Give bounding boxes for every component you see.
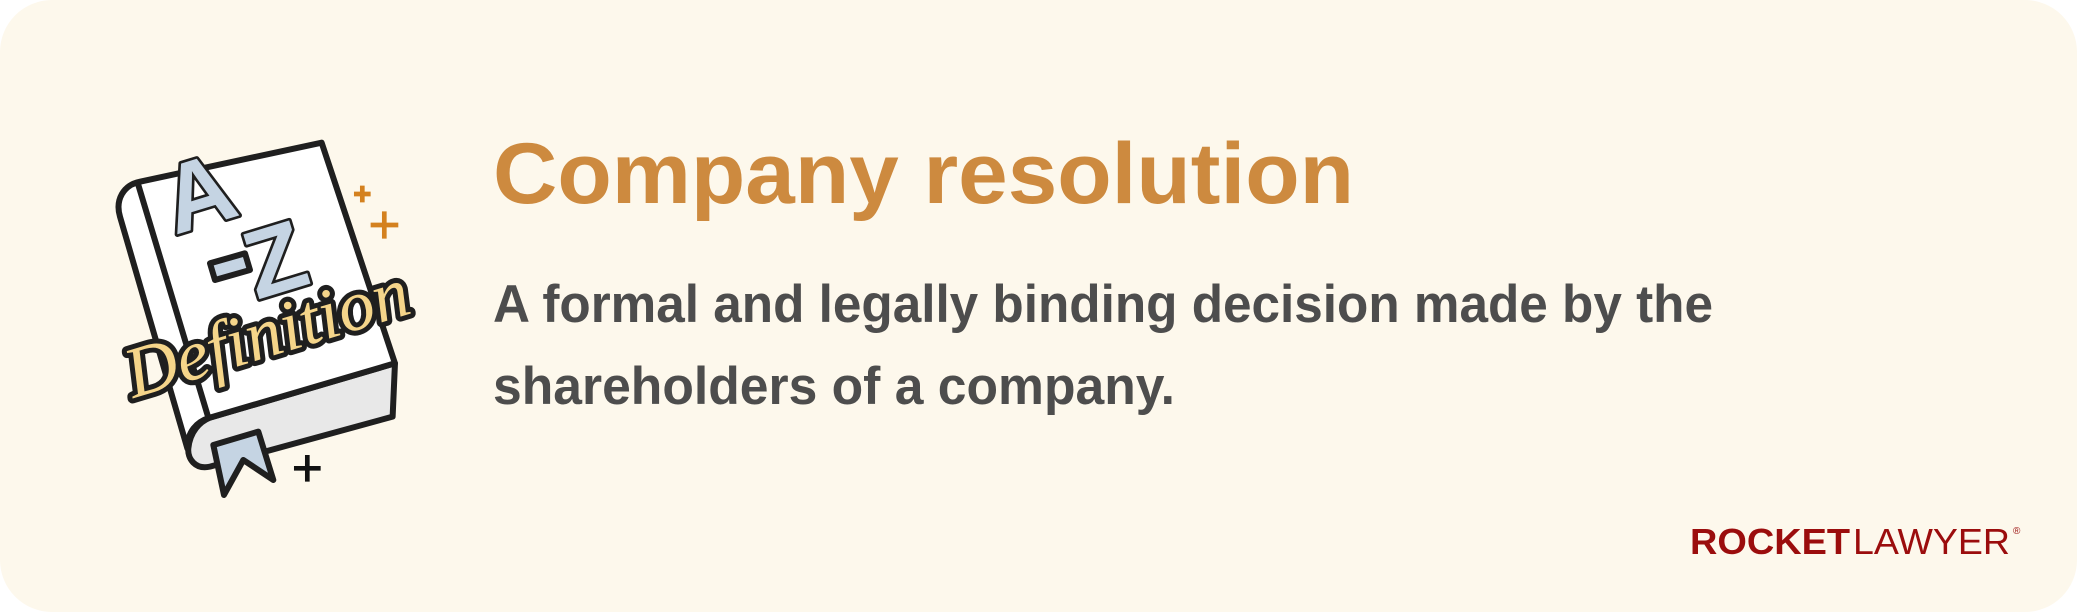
bookmark bbox=[213, 432, 273, 495]
logo: Rocket Lawyer: LAWYER bbox=[1853, 521, 2010, 562]
definition text: A formal and legally binding decision made by the bbox=[493, 275, 1713, 334]
sparkles bbox=[354, 186, 398, 239]
letter Z: Z bbox=[232, 200, 319, 320]
definition text bbox=[493, 275, 1713, 416]
title: Company resolution bbox=[493, 126, 1354, 222]
icon: A-Z definition book bbox=[114, 132, 418, 495]
definition text: shareholders of a company. bbox=[493, 357, 1175, 416]
dash bbox=[210, 253, 250, 280]
logo: Rocket Lawyer: ® bbox=[2013, 526, 2021, 537]
book cover bbox=[119, 143, 395, 448]
Definition script: Definition bbox=[114, 252, 418, 414]
logo: Rocket Lawyer: ROCKET bbox=[1690, 521, 1850, 562]
logo: Rocket Lawyer bbox=[1690, 521, 2021, 562]
book pages bbox=[188, 363, 395, 467]
letter A: A bbox=[150, 132, 248, 255]
